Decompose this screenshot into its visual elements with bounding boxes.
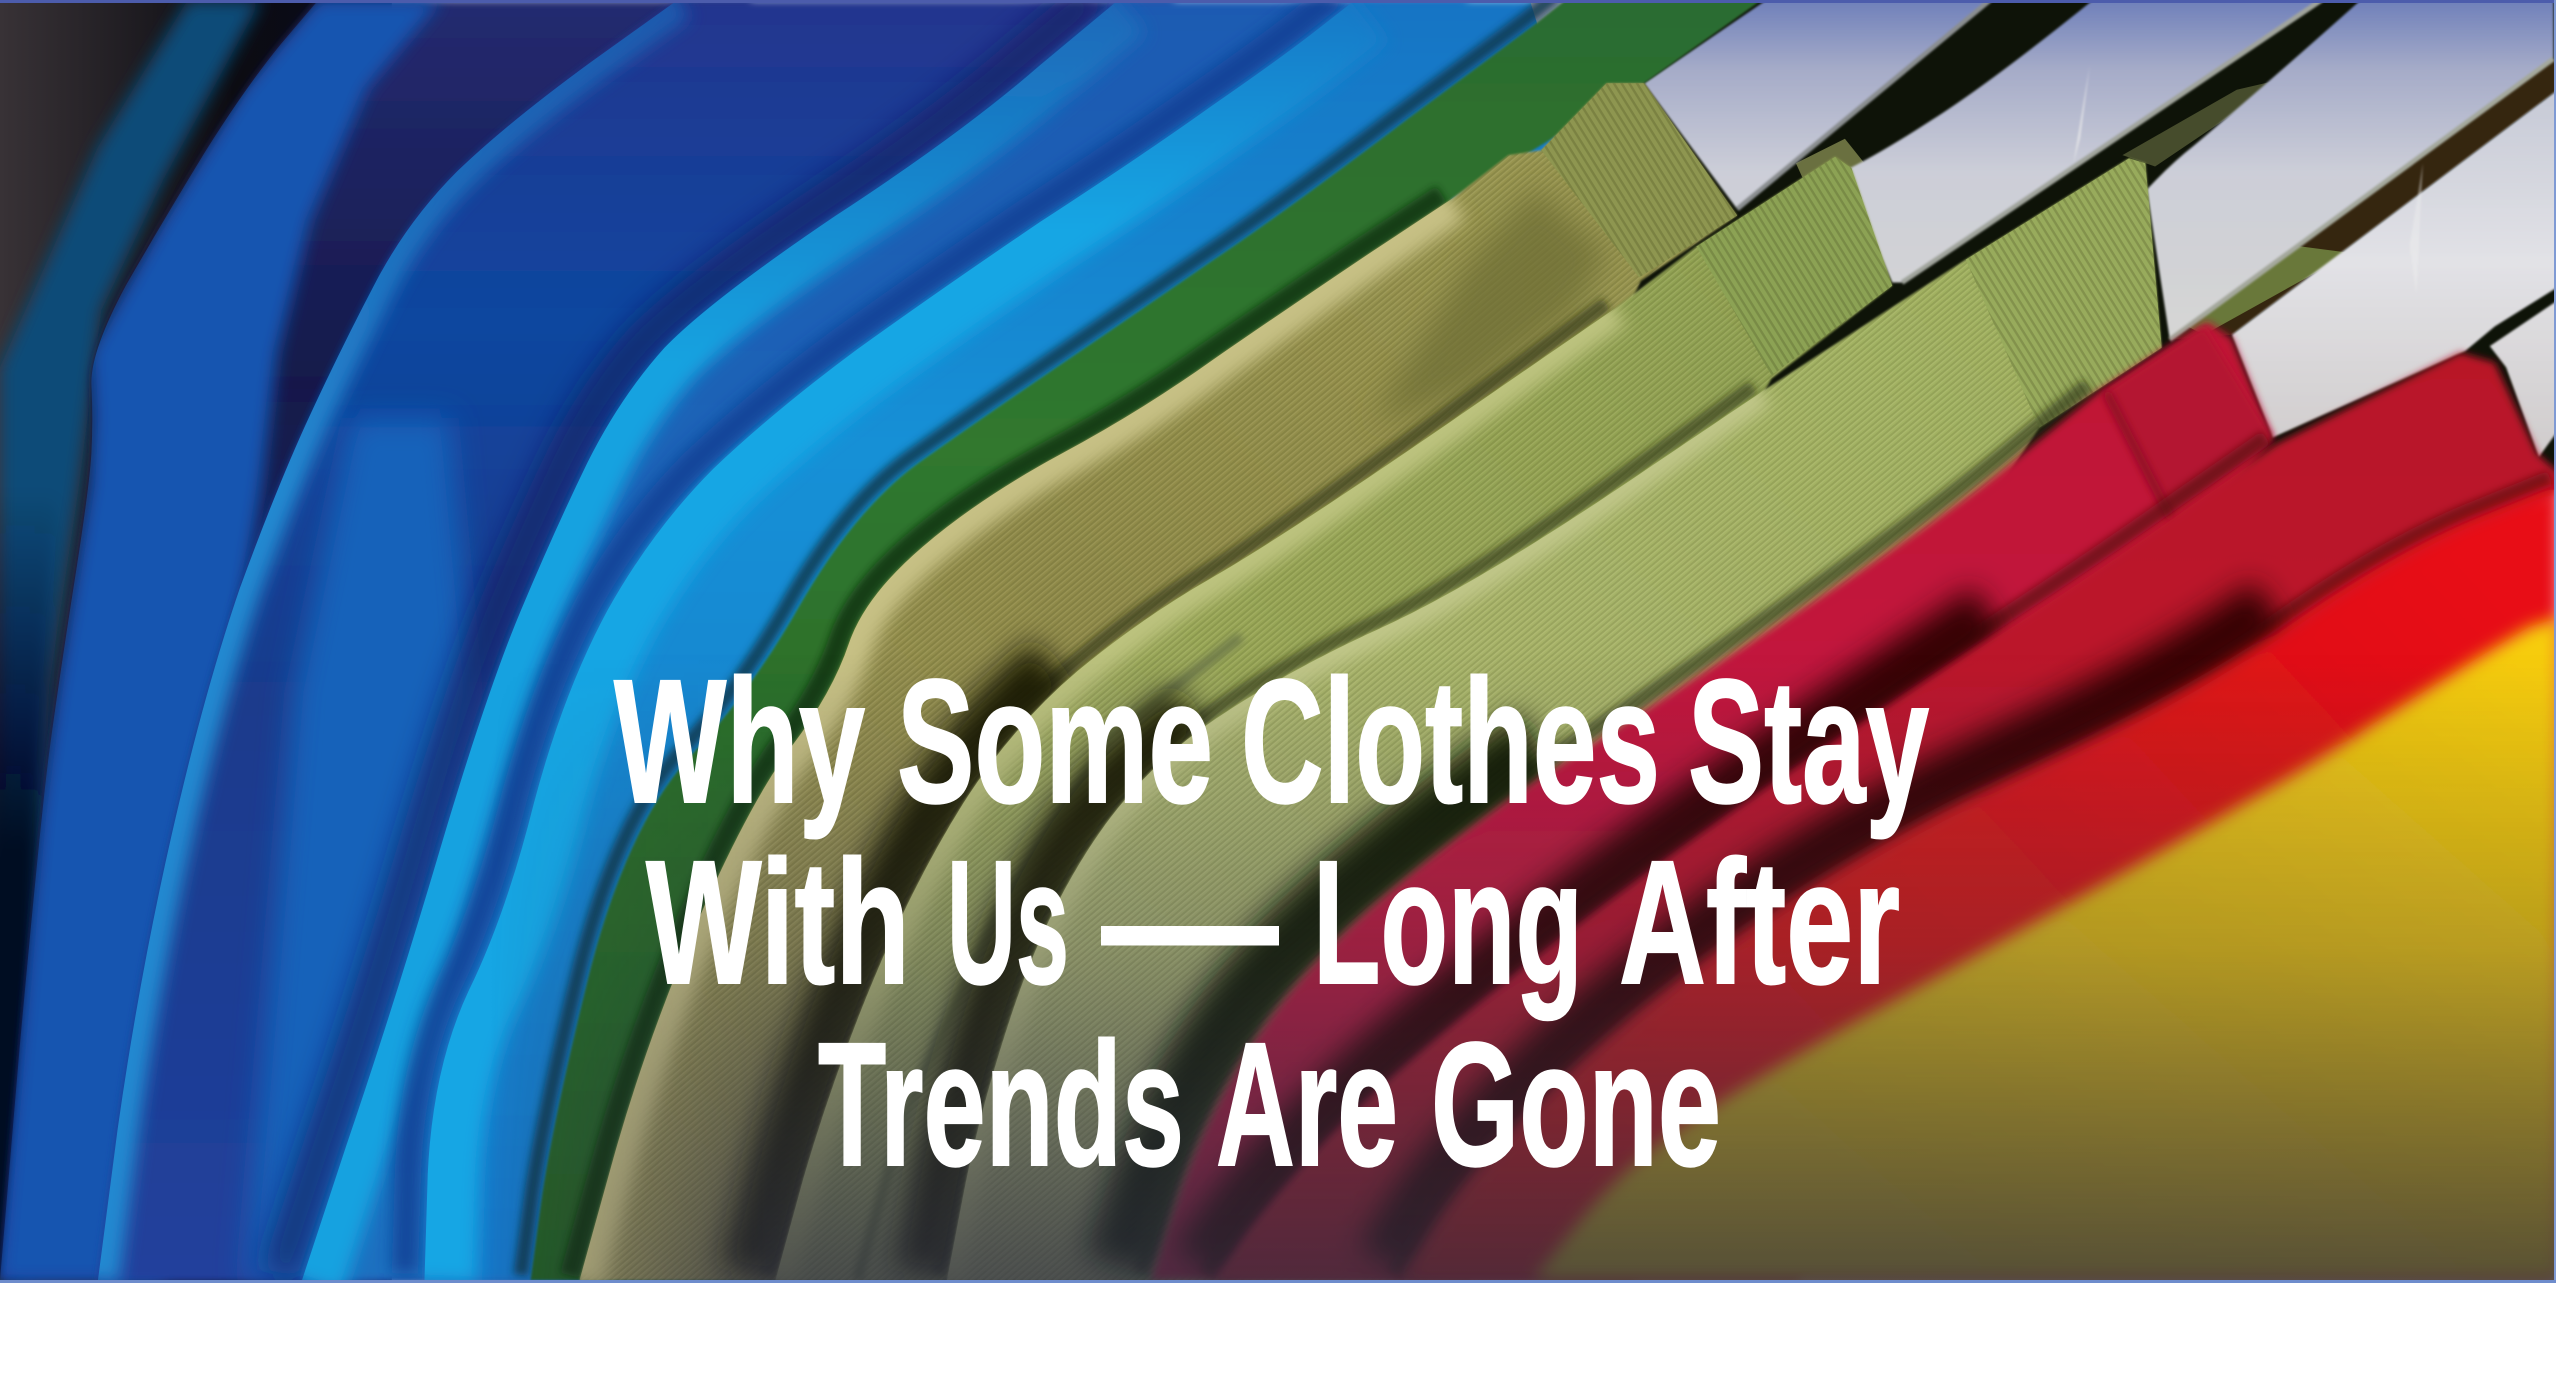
title line 1: Stay xyxy=(1688,644,1929,840)
sky-blue shirt 4 xyxy=(405,0,1633,1280)
title line 2: After xyxy=(1619,825,1900,1021)
photo top border xyxy=(0,0,2556,3)
light olive shirt with ribbed collar xyxy=(921,158,2162,1280)
olive shirt with ribbed collar xyxy=(749,157,1892,1280)
title line 2: With xyxy=(646,825,910,1021)
far-left teal shirt xyxy=(0,0,261,1280)
blue shirt 2 xyxy=(98,0,1176,1280)
title xyxy=(614,644,1929,1203)
title line 2: Us xyxy=(947,825,1069,1021)
title line 3: Are xyxy=(1216,1007,1398,1203)
dark green shirt xyxy=(521,0,1762,1280)
title line 3: Trends xyxy=(818,1007,1184,1203)
bright red shirt xyxy=(1381,478,2560,1280)
title line 1: Clothes xyxy=(1241,644,1660,840)
title line 1: Why xyxy=(614,644,865,840)
photo right border xyxy=(2554,0,2556,1282)
yellow shirt xyxy=(1533,617,2560,1280)
blue shirt 1 xyxy=(0,0,751,1280)
title line 1: Some xyxy=(897,644,1213,840)
photo bottom border xyxy=(0,1280,2556,1283)
title line 3: Gone xyxy=(1431,1007,1721,1203)
khaki shirt with ribbed collar xyxy=(570,83,1737,1280)
title line 2: — xyxy=(1102,825,1278,1021)
title line 2: Long xyxy=(1313,825,1583,1021)
sky-blue shirt 3 xyxy=(279,0,1469,1280)
lower photo shading xyxy=(0,620,2560,1290)
crimson shirt xyxy=(1118,322,2273,1280)
plastic hangers xyxy=(1644,0,2560,457)
red shirt xyxy=(1197,353,2560,1280)
